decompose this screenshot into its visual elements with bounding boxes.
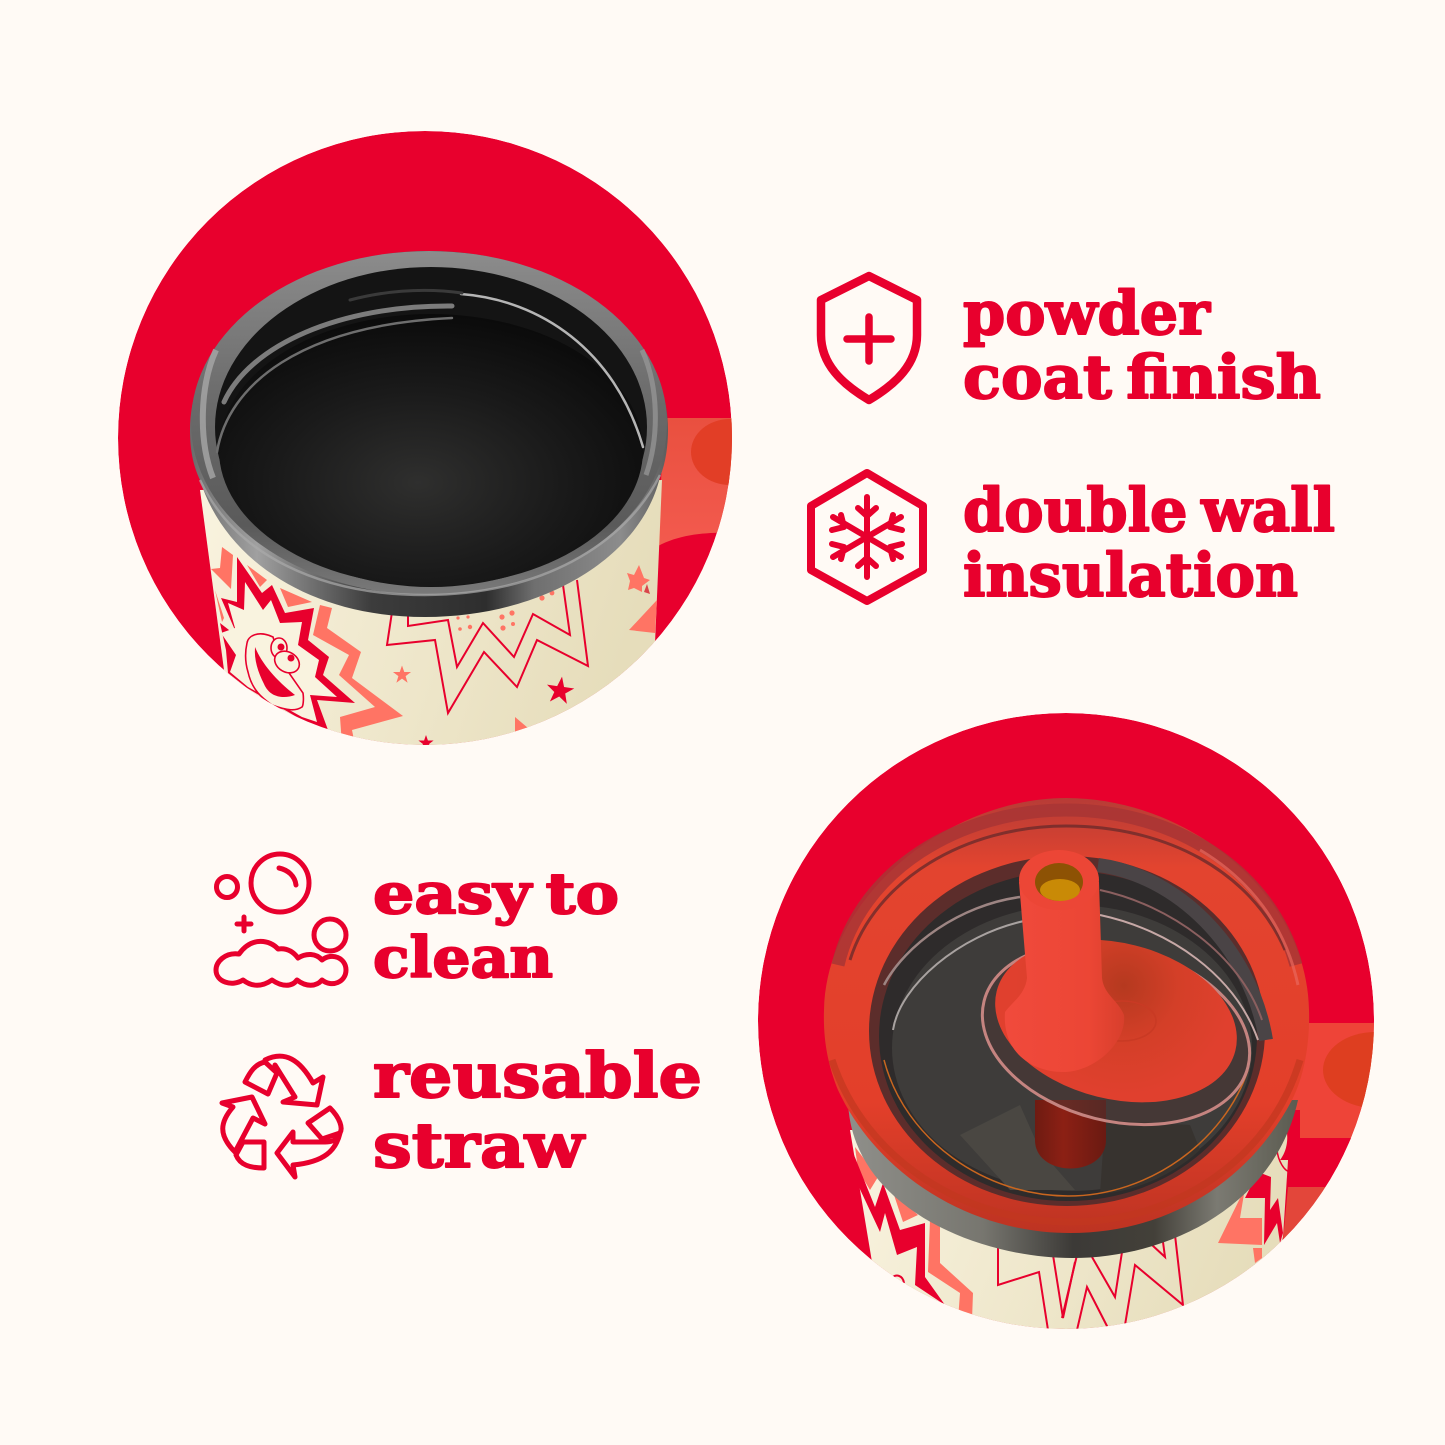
heading: double wall insulation: insulation <box>963 541 1298 611</box>
steel rim and interior <box>190 251 668 617</box>
heading: powder coat finish <box>963 279 1321 413</box>
heading: reusable straw: straw <box>373 1109 586 1182</box>
handle <box>659 418 732 546</box>
cup body with pattern <box>200 480 662 760</box>
lid well <box>869 856 1265 1206</box>
straw below lid <box>1035 1100 1106 1168</box>
cup body with pattern <box>850 1110 1300 1340</box>
heading: double wall insulation: double wall <box>963 476 1335 546</box>
panel: lid and straw photo circle <box>758 713 1427 1340</box>
Elmo face <box>246 634 303 710</box>
handle <box>1283 1023 1374 1240</box>
comic burst outline <box>890 1235 1183 1330</box>
panel: open tumbler photo circle <box>118 131 769 760</box>
icon: recycling arrows <box>222 1056 341 1177</box>
heading: powder coat finish: powder <box>963 279 1211 349</box>
steel collar <box>848 1100 1298 1258</box>
glass highlights <box>884 865 1266 1040</box>
heading: easy to clean <box>373 861 619 991</box>
pink zigzag shapes <box>855 1147 1262 1320</box>
pink zigzag shapes <box>211 547 657 745</box>
lid top glass bands <box>832 810 1300 1222</box>
icon: shield with plus <box>821 276 917 400</box>
heading: easy to clean: clean <box>373 925 553 991</box>
comic burst outline <box>387 580 588 713</box>
heading: easy to clean: easy to <box>373 861 619 927</box>
clear red lid <box>824 798 1309 1233</box>
Elmo starburst <box>220 557 355 730</box>
heading: reusable straw <box>373 1039 702 1182</box>
red zigzag shapes <box>852 1150 1283 1305</box>
straw base disc and stopper <box>980 940 1252 1126</box>
heading: reusable straw: reusable <box>373 1039 702 1112</box>
stars <box>393 666 576 749</box>
icon: soap bubbles and foam <box>216 854 346 985</box>
heading: powder coat finish: coat finish <box>963 343 1321 413</box>
pink dots <box>456 591 554 631</box>
heading: double wall insulation <box>963 476 1335 611</box>
rim highlights <box>217 290 643 452</box>
icon: hexagon with snowflake <box>811 473 923 601</box>
straw <box>1005 850 1124 1072</box>
